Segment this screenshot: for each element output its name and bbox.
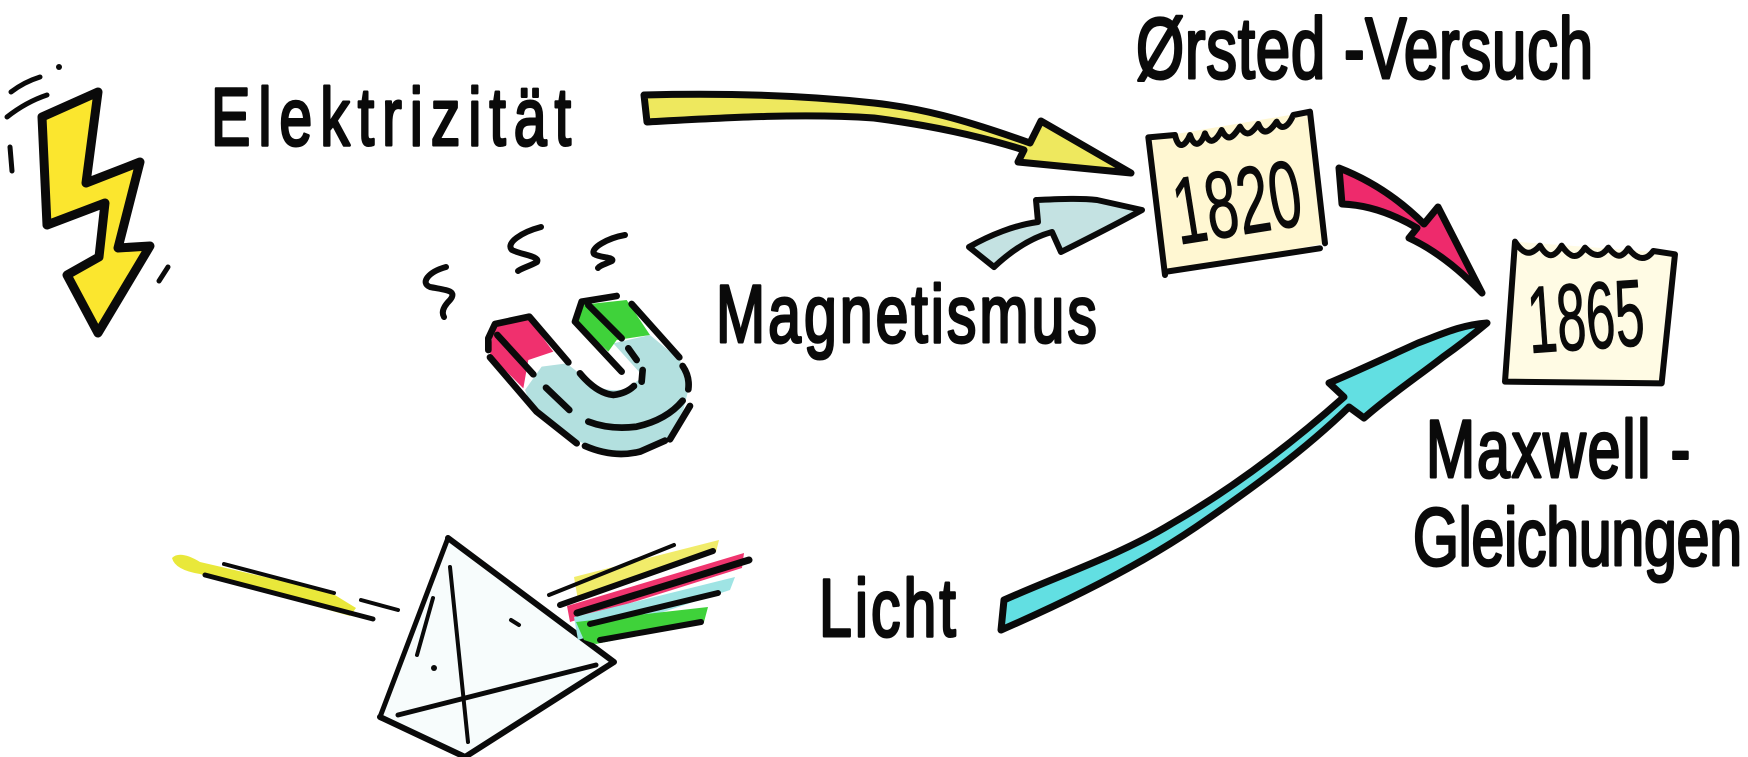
arrow: pink, 1820 to 1865 <box>1339 168 1482 293</box>
icon: prism with light beams <box>172 538 749 757</box>
prism body <box>380 538 614 757</box>
year: 1865: 1865 <box>1524 260 1648 374</box>
label: Maxwell-Gleichungen: Gleichungen <box>1413 492 1742 583</box>
label: Magnetismus: Magnetismus <box>716 269 1097 360</box>
icon: lightning bolt <box>7 64 168 333</box>
label: Licht: Licht <box>819 563 956 654</box>
arrow: yellow, Elektrizität to 1820 <box>644 94 1131 173</box>
incoming yellow beam <box>172 555 398 619</box>
year: 1820: 1820 <box>1166 141 1309 265</box>
icon: magnet sparks <box>426 227 625 317</box>
note card: 1820 <box>1148 112 1325 275</box>
note card: 1865 <box>1505 242 1675 383</box>
refracted rainbow beams <box>549 540 749 644</box>
label: Maxwell-Gleichungen: Maxwell - <box>1426 404 1690 495</box>
arrow: cyan, Licht to 1865 <box>1001 323 1487 630</box>
icon: horseshoe magnet <box>488 296 690 455</box>
label: Elektrizität: Elektrizität <box>211 72 571 163</box>
heading: Ørsted-Versuch: Ørsted -Versuch <box>1136 0 1593 96</box>
arrow: grey-blue, Magnetismus to 1820 <box>969 199 1142 267</box>
label: Maxwell-Gleichungen <box>1413 404 1742 583</box>
